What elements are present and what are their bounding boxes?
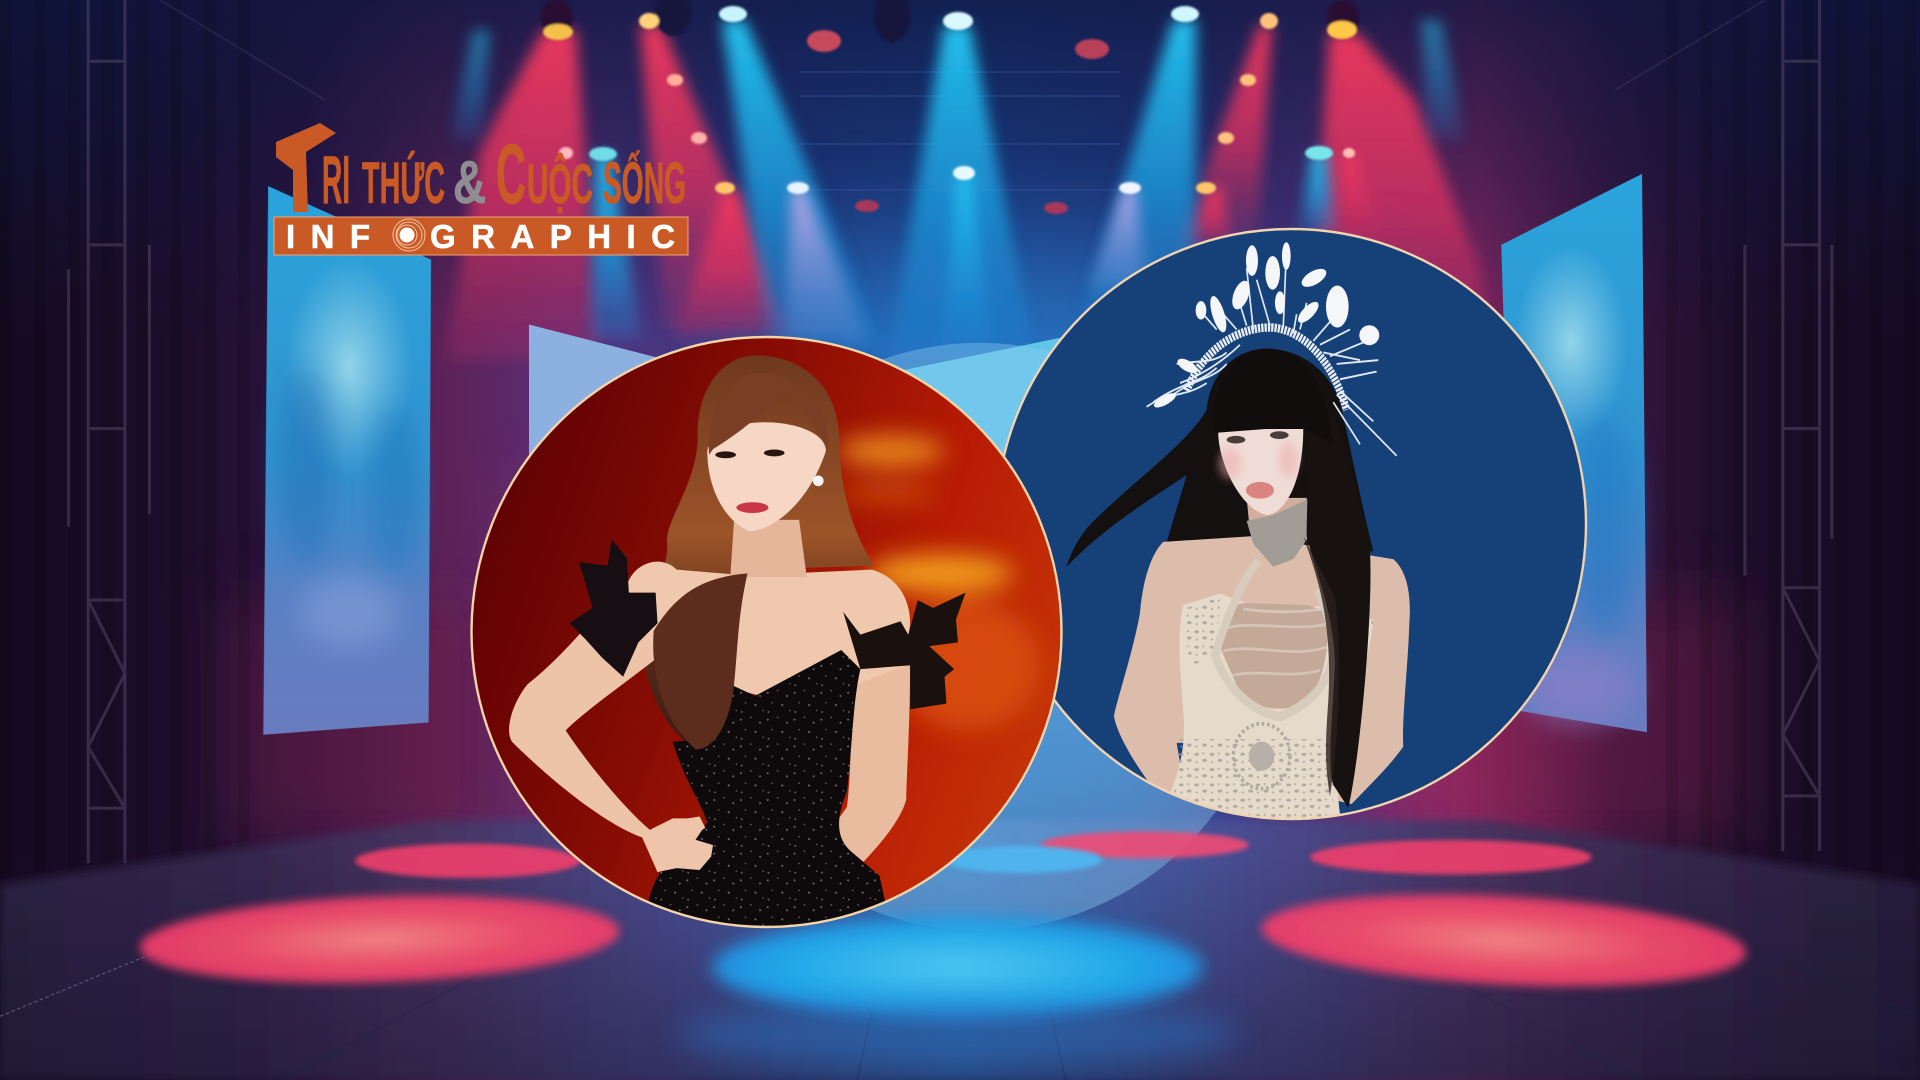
front hair left singer [653,573,747,749]
left wall truss [69,0,149,863]
logo band [274,217,688,255]
back hair left singer [642,355,874,753]
dress embroidery right singer [1170,597,1373,830]
hair front right singer [1303,414,1370,808]
black dress [648,650,887,937]
eyes right singer [1227,431,1289,444]
orange motion streaks [837,436,1040,730]
bangs right singer [1218,348,1272,433]
logo wordmark: C [496,127,526,221]
body skin right singer [1114,536,1410,804]
left LED screen [263,186,431,735]
face right singer [1218,429,1303,515]
lips right singer [1246,482,1274,499]
stage floor [0,820,1920,1080]
feather crown [1147,242,1397,456]
logo band text: INF [286,218,370,255]
curtain stripes right [1660,0,1920,890]
center-left LED screen [529,324,686,514]
red spotlight beams [445,25,1490,360]
dress strap [1215,561,1333,717]
logo band text [286,218,675,255]
hand on hip [642,816,713,872]
torso skin left singer [627,562,910,696]
cheeks right singer [1218,442,1298,479]
face left singer [707,422,826,531]
logo wordmark [322,127,686,221]
bodice folds [1223,609,1327,676]
right arm left singer [753,665,910,935]
left arm left singer [509,577,711,872]
bangs left singer [709,372,828,455]
hair strands over chest [1303,536,1339,796]
eyes left singer [715,449,785,458]
logo band text: GRAPHIC [430,218,675,255]
neck right singer [1247,498,1307,532]
logo wordmark: & [453,149,486,216]
earring [813,475,824,486]
sheer bodice [1220,603,1330,709]
logo target O [393,219,425,251]
ceiling rigging lines [160,0,1765,190]
translucent centre circle [686,343,1273,931]
stage light fixtures [541,0,1359,214]
shoulder ornament right [843,593,966,709]
right LED screen [1501,174,1647,732]
logo T mark [276,123,336,212]
blue spotlight beams [450,20,1465,360]
collar right singer [1246,499,1308,567]
shoulder ornament left [570,539,658,677]
center LED screen [857,337,1065,514]
left floor diagonal highlight [0,933,202,1016]
logo wordmark: THỨC [362,151,445,216]
dress right singer [1167,594,1373,830]
lips left singer [736,502,769,513]
right wall truss [1745,0,1832,851]
logo: Tri Thức & Cuộc Sống Infographic [274,123,688,255]
portrait: left singer [472,337,1062,937]
floor tile lines [0,933,1920,1080]
infographic canvas: SỐNG [603,151,686,216]
portrait: right singer [996,229,1586,830]
neck left singer [730,520,807,577]
curtain stripes left [0,0,260,890]
floor light pools [138,831,1748,1067]
logo wordmark: RI [322,142,350,218]
lilac spotlight beams [785,188,1145,340]
hair back right singer [1066,348,1374,567]
logo wordmark: UỘC [527,152,593,215]
